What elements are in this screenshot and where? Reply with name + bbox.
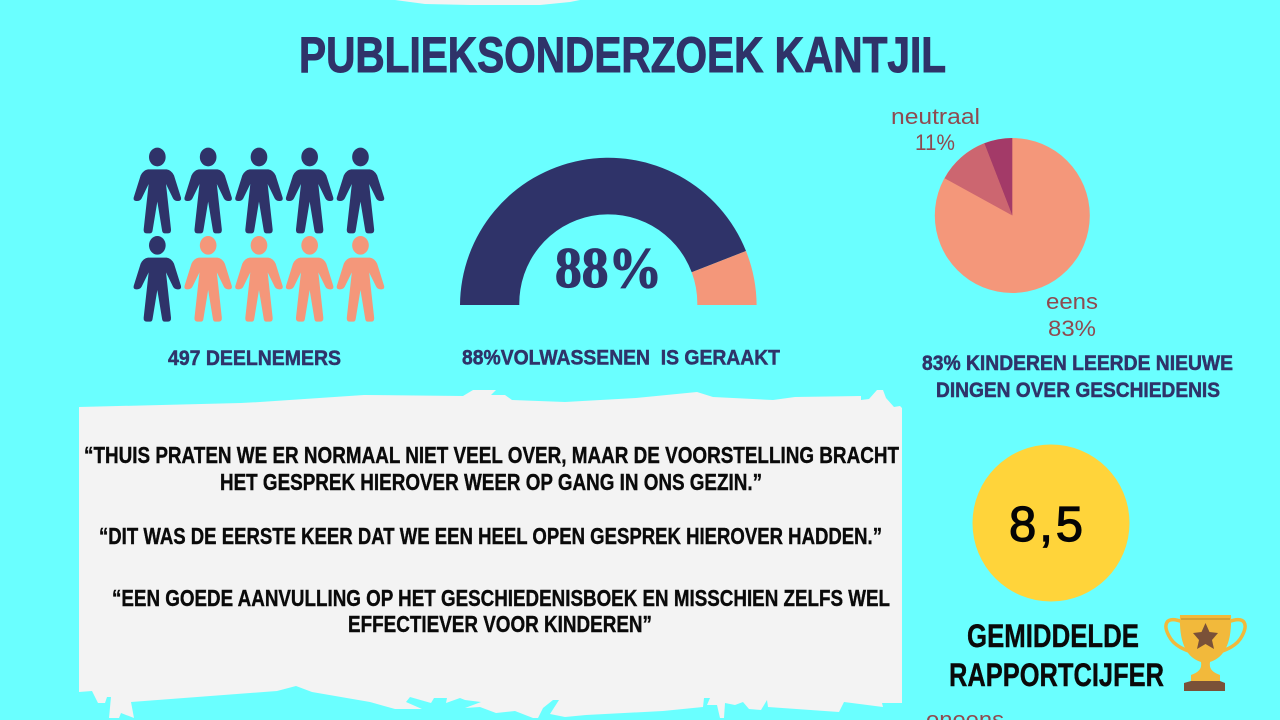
label: children xyxy=(922,352,1233,402)
label: children: DINGEN OVER GESCHIEDENIS xyxy=(936,379,1220,402)
pie chart xyxy=(935,138,1090,293)
quote 1: “THUIS PRATEN WE ER NORMAAL NIET VEEL OVER, MAAR DE VOORSTELLING BRACHT xyxy=(84,442,899,468)
gauge value: 88% xyxy=(555,237,662,300)
quote 3: EFFECTIEVER VOOR KINDEREN” xyxy=(348,611,652,637)
pie label: neutral: 11% xyxy=(915,130,955,155)
label: children: 83% KINDEREN LEERDE NIEUWE xyxy=(922,352,1233,375)
label: average grade: GEMIDDELDE xyxy=(967,618,1139,654)
label: average grade xyxy=(949,618,1164,693)
pie label: neutral xyxy=(891,104,980,155)
score value: 8,5 xyxy=(1009,498,1083,552)
pie label: agree: eens xyxy=(1046,289,1098,314)
icon: trophy xyxy=(1166,615,1245,691)
pie label: agree: 83% xyxy=(1048,316,1096,341)
label: participants: 497 DEELNEMERS xyxy=(168,347,341,370)
title: PUBLIEKSONDERZOEK KANTJIL xyxy=(299,27,946,83)
gauge chart xyxy=(460,158,757,305)
score badge xyxy=(972,444,1130,602)
panel: quotes xyxy=(79,390,902,718)
icon: people pictogram xyxy=(134,148,384,322)
top torn paper sliver xyxy=(395,0,580,5)
quote 3 xyxy=(112,585,890,637)
quote 2: “DIT WAS DE EERSTE KEER DAT WE EEN HEEL OPEN GESPREK HIEROVER HADDEN.” xyxy=(99,523,882,549)
quote 1 xyxy=(84,442,899,495)
quote 3: “EEN GOEDE AANVULLING OP HET GESCHIEDENISBOEK EN MISSCHIEN ZELFS WEL xyxy=(112,585,890,611)
label: adults: 88%VOLWASSENEN IS GERAAKT xyxy=(462,346,780,370)
pie label: neutral: neutraal xyxy=(891,104,980,129)
pie label: agree xyxy=(1046,289,1098,341)
quote 1: HET GESPREK HIEROVER WEER OP GANG IN ONS GEZIN.” xyxy=(220,469,762,495)
label: average grade: RAPPORTCIJFER xyxy=(949,657,1164,693)
